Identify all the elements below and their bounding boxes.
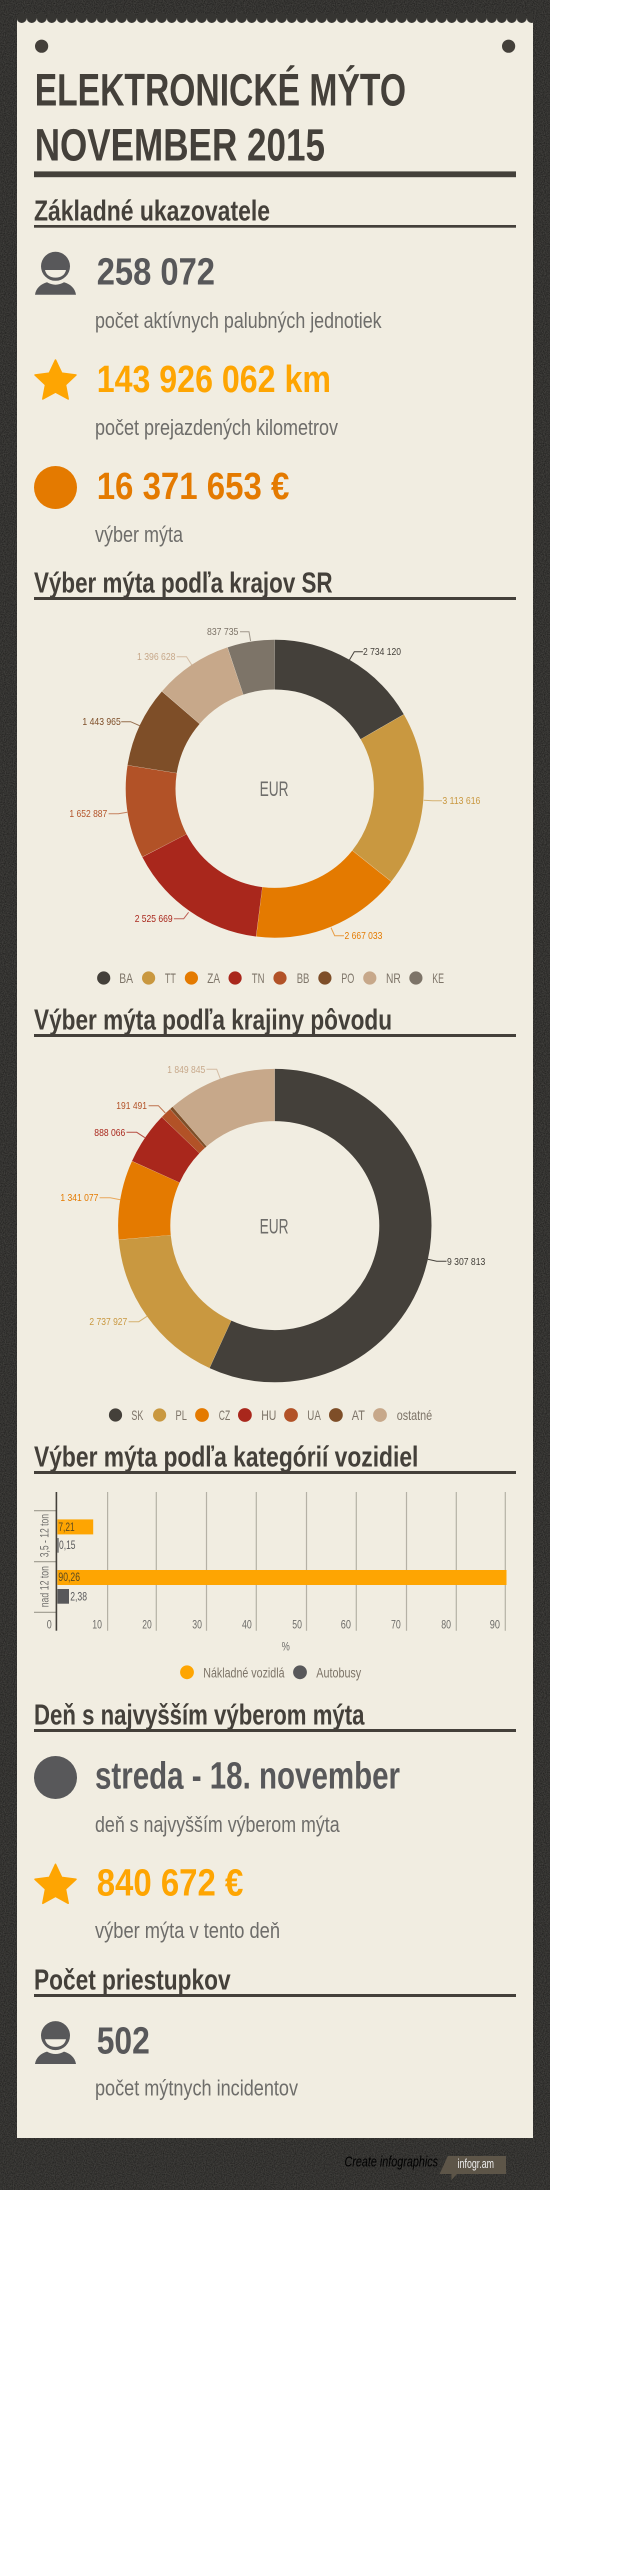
bar values: 2,38 xyxy=(70,1589,87,1603)
data labels: countries xyxy=(60,1064,485,1328)
data labels: regions: 2 525 669 xyxy=(135,913,173,925)
icon: person xyxy=(35,252,76,295)
x axis labels: 70 xyxy=(391,1617,401,1631)
legend: regions: TT xyxy=(165,970,176,986)
pins xyxy=(35,40,515,53)
legend: countries: AT xyxy=(352,1407,365,1423)
data labels: regions: 837 735 xyxy=(207,626,239,638)
x axis labels: 40 xyxy=(242,1617,252,1631)
bars xyxy=(57,1519,507,1604)
legend: countries: PL xyxy=(176,1407,187,1423)
x axis labels: 80 xyxy=(441,1617,451,1631)
data labels: regions: 1 652 887 xyxy=(69,808,107,820)
legend: regions xyxy=(97,970,444,986)
footer: infogr.am badge: infogr.am xyxy=(458,2156,494,2171)
data labels: countries: 1 341 077 xyxy=(60,1192,99,1204)
legend: countries: ostatné xyxy=(397,1407,432,1423)
donut center label: EUR xyxy=(260,1215,289,1238)
data labels: regions: 1 396 628 xyxy=(137,651,176,663)
heading: výber mýta podľa krajov: Výber mýta podľa krajov SR xyxy=(34,568,333,600)
stat: eur: 16 371 653 € xyxy=(97,466,289,508)
legend: regions: PO xyxy=(341,970,354,986)
category labels: 3,5 - 12 ton xyxy=(38,1514,52,1557)
data labels: countries: 9 307 813 xyxy=(447,1256,485,1268)
legend: countries: CZ xyxy=(219,1407,230,1423)
data labels: countries: 888 066 xyxy=(94,1127,125,1139)
x axis labels: 0 xyxy=(47,1617,52,1631)
heading: počet priestupkov: Počet priestupkov xyxy=(34,1964,231,1996)
stat: 502: 502 xyxy=(97,2020,150,2062)
legend: regions: BA xyxy=(119,970,133,986)
bar values: 0,15 xyxy=(59,1538,76,1552)
bar values xyxy=(58,1520,87,1603)
stat: 258 072: 258 072 xyxy=(97,252,215,294)
legend: regions: NR xyxy=(386,970,401,986)
footer: create infographics: Create infographics xyxy=(344,2154,438,2171)
heading: výber mýta podľa krajiny pôvodu: Výber mýta podľa krajiny pôvodu xyxy=(34,1004,392,1036)
bar values: 90,26 xyxy=(58,1570,80,1584)
stat: km: 143 926 062 km xyxy=(97,359,331,401)
x axis labels: 60 xyxy=(341,1617,351,1631)
x axis title: % xyxy=(282,1640,290,1654)
text: počet prejazdených kilometrov: počet prejazdených kilometrov xyxy=(95,415,338,440)
x axis labels xyxy=(47,1617,500,1631)
legend: regions: ZA xyxy=(207,970,220,986)
text: počet aktívnych palubných jednotiek: počet aktívnych palubných jednotiek xyxy=(95,308,382,333)
category labels: nad 12 ton xyxy=(38,1566,52,1607)
data labels: countries: 2 737 927 xyxy=(89,1316,127,1328)
text: výber mýta v tento deň: výber mýta v tento deň xyxy=(95,1918,280,1943)
text: výber mýta: výber mýta xyxy=(95,522,184,547)
data labels: regions: 2 734 120 xyxy=(363,646,401,658)
data labels: regions xyxy=(69,626,481,942)
title xyxy=(34,64,516,177)
heading: počet priestupkov xyxy=(34,1964,516,1997)
title: NOVEMBER 2015 xyxy=(35,120,325,171)
x axis labels: 90 xyxy=(490,1617,500,1631)
heading: deň s najvyšším výberom mýta: Deň s najvyšším výberom mýta xyxy=(34,1700,365,1732)
x axis labels: 50 xyxy=(292,1617,302,1631)
bar chart: vehicle categories xyxy=(34,1492,506,1654)
icon: grey circle xyxy=(34,1756,77,1799)
data labels: countries: 1 849 845 xyxy=(167,1064,205,1076)
heading: základné ukazovatele: Základné ukazovatele xyxy=(34,196,270,228)
icon: orange circle xyxy=(34,466,77,509)
donut center label: EUR xyxy=(260,778,289,801)
text: počet mýtnych incidentov: počet mýtnych incidentov xyxy=(95,2076,298,2101)
legend: regions: TN xyxy=(252,970,264,986)
legend: vehicles xyxy=(180,1664,361,1680)
bar values: 7,21 xyxy=(58,1520,75,1534)
icon: star xyxy=(35,360,76,399)
legend: countries: HU xyxy=(261,1407,276,1423)
legend: regions: BB xyxy=(297,970,309,986)
data labels: regions: 3 113 616 xyxy=(442,795,481,807)
heading: výber mýta podľa kategórií vozidiel: Výber mýta podľa kategórií vozidiel xyxy=(34,1442,418,1474)
stat: day: streda - 18. november xyxy=(95,1756,400,1798)
stat: max eur: 840 672 € xyxy=(97,1863,243,1905)
legend: countries: SK xyxy=(131,1407,144,1423)
legend: countries xyxy=(109,1407,432,1423)
panel: paper sheet xyxy=(17,13,533,2138)
x axis labels: 30 xyxy=(192,1617,202,1631)
data labels: countries: 191 491 xyxy=(116,1100,147,1112)
title: ELEKTRONICKÉ MÝTO xyxy=(35,64,406,115)
legend: countries: UA xyxy=(307,1407,321,1423)
data labels: regions: 1 443 965 xyxy=(82,716,121,728)
donut chart: regions xyxy=(151,665,399,913)
icon: person xyxy=(35,2021,76,2064)
footer: infogr.am badge xyxy=(440,2156,506,2180)
data labels: regions: 2 667 033 xyxy=(344,930,383,942)
category labels xyxy=(38,1514,52,1607)
legend: vehicles: Autobusy xyxy=(316,1664,361,1680)
legend: vehicles: Nákladné vozidlá xyxy=(203,1664,285,1680)
donut chart: countries xyxy=(144,1095,405,1356)
legend: regions: KE xyxy=(432,970,444,986)
text: deň s najvyšším výberom mýta: deň s najvyšším výberom mýta xyxy=(95,1812,340,1837)
icon: star xyxy=(35,1864,76,1903)
x axis labels: 10 xyxy=(92,1617,102,1631)
x axis labels: 20 xyxy=(142,1617,152,1631)
